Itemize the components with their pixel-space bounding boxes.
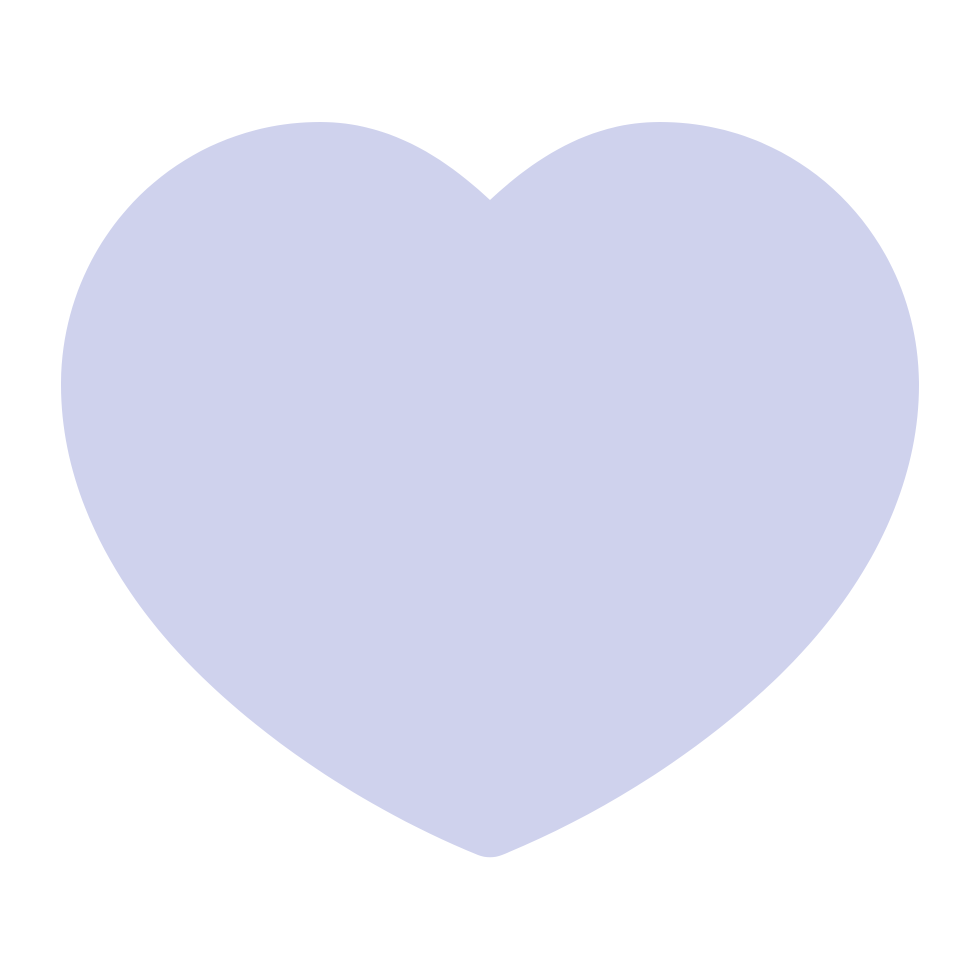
icon: lavender heart xyxy=(61,122,919,857)
